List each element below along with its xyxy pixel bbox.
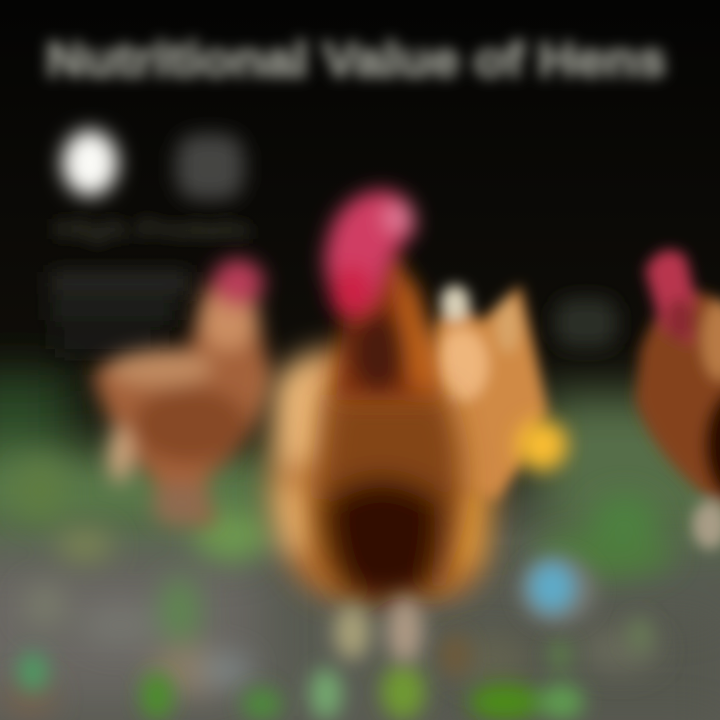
left hen comb	[212, 259, 264, 307]
main hen legs	[334, 596, 423, 664]
main hen	[268, 190, 548, 664]
left hen body	[92, 285, 272, 527]
green leaves	[18, 617, 652, 720]
icon: grey circle	[176, 134, 244, 200]
right hen leg	[692, 501, 720, 549]
main hen comb	[325, 190, 415, 318]
main hen neck	[335, 250, 440, 400]
ground	[0, 375, 720, 720]
side label	[555, 298, 617, 348]
main hen outer body	[268, 330, 500, 598]
blue pebble	[520, 556, 596, 624]
icon: white circle	[62, 130, 118, 196]
hen tail feathers	[435, 285, 548, 500]
ground foliage and pebbles	[4, 458, 675, 716]
subheading: High Protein	[55, 214, 250, 244]
yellow flower	[516, 419, 568, 471]
left hen	[92, 259, 272, 527]
right hen	[635, 250, 720, 549]
title: Nutritional Value of Hens	[46, 34, 666, 87]
main hen breast	[317, 395, 461, 600]
text block: Rich in vitamins	[50, 273, 190, 295]
right hen body	[635, 292, 720, 520]
right hen comb	[645, 250, 695, 345]
text block	[50, 272, 190, 351]
